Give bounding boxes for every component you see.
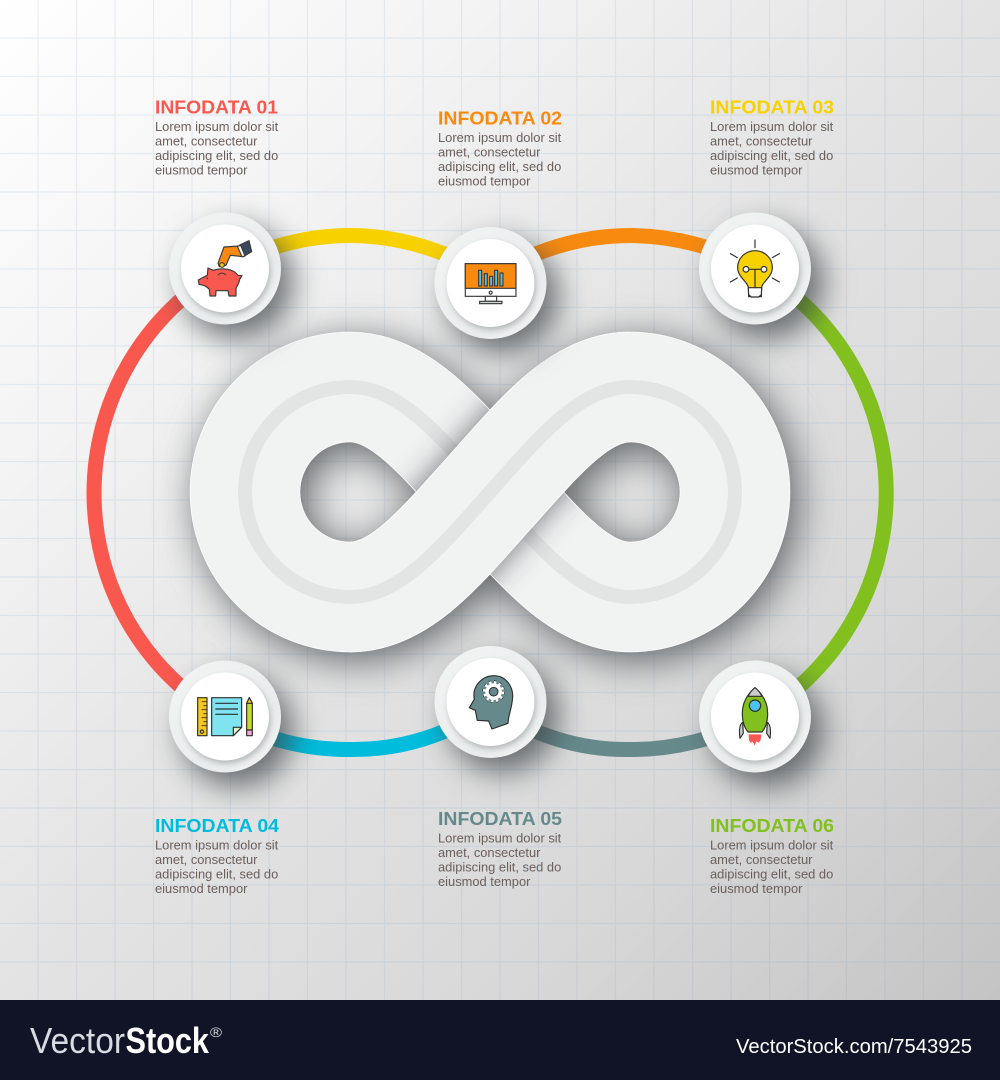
node 2: monitor xyxy=(434,227,546,339)
text block: infodata 02: Lorem ipsum dolor sit xyxy=(438,130,562,145)
panel: coloured ring segments xyxy=(94,236,886,750)
text block: infodata 06: eiusmod tempor xyxy=(710,881,803,896)
text block: infodata 02: adipiscing elit, sed do xyxy=(438,159,561,174)
logo text: Stock xyxy=(126,1020,210,1061)
infinity symbol xyxy=(245,387,735,597)
text block: infodata 01: Lorem ipsum dolor sit xyxy=(155,119,279,134)
text block: infodata 06: amet, consectetur xyxy=(710,852,813,867)
text block: infodata 04: adipiscing elit, sed do xyxy=(155,866,278,882)
text block: infodata 03 xyxy=(710,96,834,177)
text block: infodata 05 xyxy=(438,808,562,889)
text block: infodata 04 xyxy=(155,815,280,896)
icon: light bulb xyxy=(730,240,779,297)
text block: infodata 04: amet, consectetur xyxy=(155,852,258,867)
arc: cyan xyxy=(225,706,490,750)
text block: infodata 02 xyxy=(438,108,562,188)
text block: infodata 05: eiusmod tempor xyxy=(438,874,531,889)
logo text xyxy=(30,1020,223,1061)
icon: ruler, note and pencil xyxy=(198,698,252,736)
text block: infodata 01: amet, consectetur xyxy=(155,133,258,148)
arc: orange xyxy=(490,236,755,278)
text block: infodata 06: Lorem ipsum dolor sit xyxy=(710,838,834,852)
text block: infodata 03: Lorem ipsum dolor sit xyxy=(710,119,834,134)
footer bar xyxy=(0,1000,1000,1080)
text block: infodata 05: amet, consectetur xyxy=(438,845,541,860)
text block: infodata 05: Lorem ipsum dolor sit xyxy=(438,830,562,846)
text block: infodata 02: amet, consectetur xyxy=(438,144,541,159)
node 1: piggy bank xyxy=(169,212,281,324)
icon: piggy bank and hand xyxy=(198,241,252,296)
text block: infodata 03: amet, consectetur xyxy=(710,133,813,148)
text block: infodata 04: INFODATA 04 xyxy=(155,815,280,836)
text block: infodata 04: eiusmod tempor xyxy=(155,881,248,896)
text block: infodata 01: eiusmod tempor xyxy=(155,162,248,177)
text block: infodata 06: adipiscing elit, sed do xyxy=(710,866,833,882)
text block: infodata 06 xyxy=(710,815,834,896)
footer url: VectorStock.com/7543925 xyxy=(736,1036,972,1058)
text block: infodata 03: INFODATA 03 xyxy=(710,96,834,118)
arc: red xyxy=(94,269,225,718)
text block: infodata 01 xyxy=(155,96,279,177)
node 3: light bulb xyxy=(699,212,811,324)
arc: slate xyxy=(490,706,755,750)
text block: infodata 04: Lorem ipsum dolor sit xyxy=(155,838,279,852)
logo text: ® xyxy=(210,1024,223,1040)
icon: monitor with bar chart xyxy=(465,264,516,304)
text block: infodata 03: eiusmod tempor xyxy=(710,162,803,177)
text block: infodata 01: INFODATA 01 xyxy=(155,96,278,118)
text block: infodata 05: INFODATA 05 xyxy=(438,808,562,829)
node 4: notes and tools xyxy=(169,660,281,772)
node 6: rocket xyxy=(699,660,811,772)
logo text: Vector xyxy=(30,1020,125,1061)
node 5: head with gear xyxy=(434,646,546,758)
arc: yellow xyxy=(225,236,490,278)
icon: rocket xyxy=(739,688,770,746)
icon: head with gear xyxy=(469,676,513,729)
text block: infodata 03: adipiscing elit, sed do xyxy=(710,148,833,163)
text block: infodata 05: adipiscing elit, sed do xyxy=(438,860,561,874)
text block: infodata 02: INFODATA 02 xyxy=(438,108,562,128)
text block: infodata 06: INFODATA 06 xyxy=(710,815,834,836)
text block: infodata 02: eiusmod tempor xyxy=(438,173,531,188)
text block: infodata 01: adipiscing elit, sed do xyxy=(155,148,278,163)
arc: green xyxy=(755,269,886,718)
